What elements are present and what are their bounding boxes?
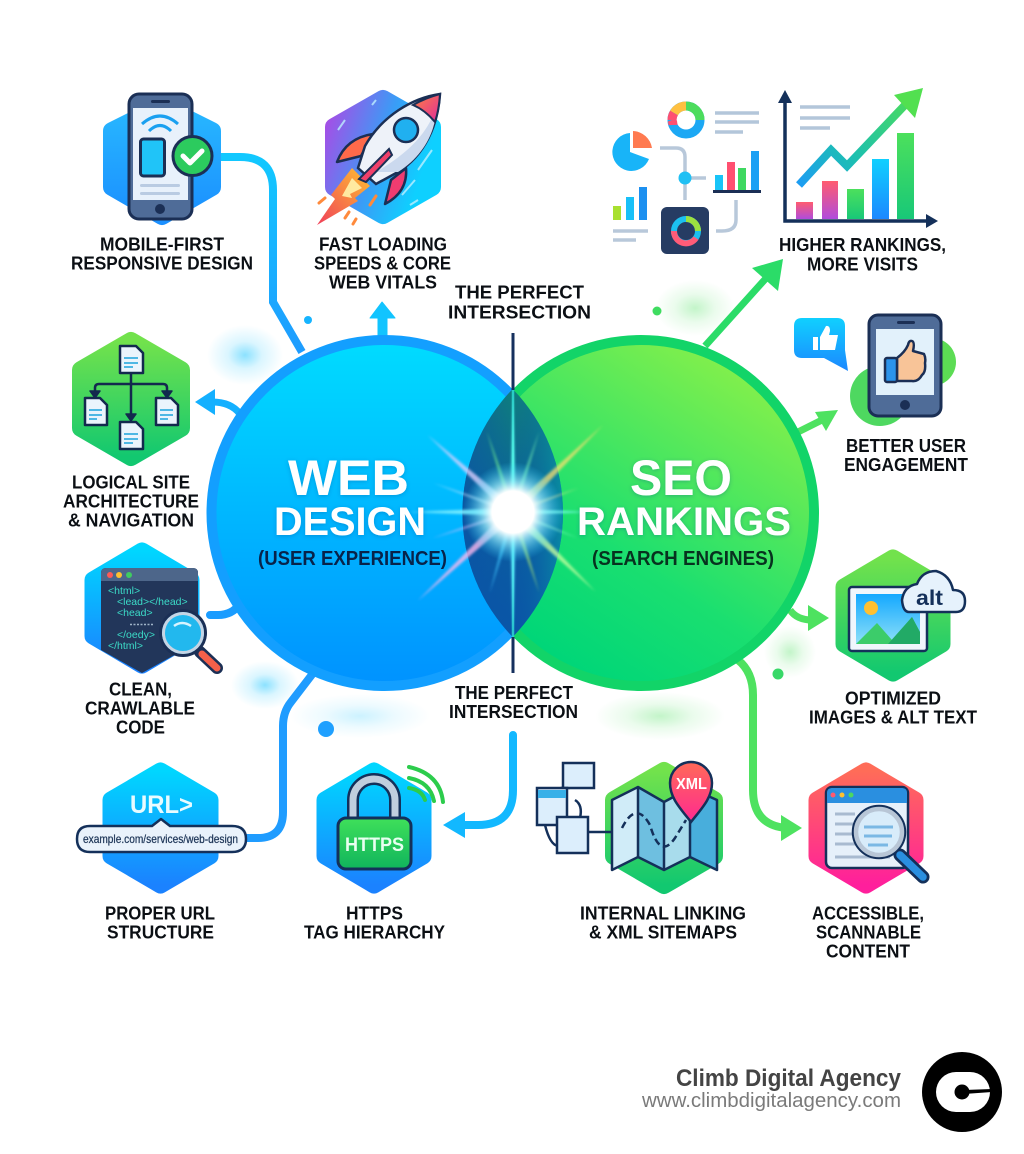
heading: web design: WEB <box>288 450 409 506</box>
icon: clean code: </oedy> <box>117 629 155 641</box>
label: internal linking: INTERNAL LINKING <box>580 904 746 924</box>
decorative glow: bottom blue <box>290 694 430 738</box>
arrow: to site architecture <box>195 389 240 415</box>
dot: blue large <box>318 721 334 737</box>
label: clean code <box>85 680 195 738</box>
label: clean code: CODE <box>116 718 165 738</box>
dot: green right <box>772 668 784 680</box>
label: fast loading: WEB VITALS <box>329 272 437 292</box>
label: site architecture: ARCHITECTURE <box>63 492 199 512</box>
label: https: HTTPS <box>346 904 403 924</box>
label: accessible content: ACCESSIBLE, <box>812 904 924 924</box>
heading: seo rankings: RANKINGS <box>577 500 791 544</box>
label: site architecture <box>63 472 199 530</box>
label: mobile-first: RESPONSIVE DESIGN <box>71 254 253 274</box>
dot: green small <box>652 306 662 316</box>
heading: seo rankings <box>577 450 791 544</box>
label: https <box>304 904 445 942</box>
icon: clean code <box>93 551 217 673</box>
label: the perfect intersection top: INTERSECTION <box>448 302 591 322</box>
icon: optimized images <box>844 558 965 673</box>
decorative glow: left top <box>207 325 283 385</box>
footer: agency name <box>641 1065 902 1112</box>
label: url structure: STRUCTURE <box>107 922 214 942</box>
icon: clean code: <lead></head> <box>117 596 188 608</box>
label: url structure: PROPER URL <box>105 904 215 924</box>
label: optimized images <box>809 688 977 728</box>
intersection lens <box>462 389 563 637</box>
icon: url structure: URL> <box>130 791 193 819</box>
decorative glow: left lower <box>231 661 299 709</box>
label: higher rankings <box>779 235 946 274</box>
subheading: search engines: (SEARCH ENGINES) <box>592 548 774 570</box>
arrow: better engagement <box>798 410 838 432</box>
label: better user engagement: BETTER USER <box>846 436 966 456</box>
decorative glow: right green <box>764 626 816 678</box>
label: clean code: CRAWLABLE <box>85 698 195 718</box>
icon: analytics cluster <box>612 106 761 254</box>
icon: clean code: <head> <box>117 607 153 619</box>
label: https: TAG HIERARCHY <box>304 922 445 942</box>
label: fast loading: FAST LOADING <box>319 234 447 254</box>
label: accessible content: CONTENT <box>826 942 910 962</box>
icon: optimized images: alt <box>916 587 943 610</box>
heading: seo rankings: SEO <box>630 450 732 506</box>
dot: blue small <box>304 316 312 324</box>
arrow: mobile connector <box>218 157 302 352</box>
label: better user engagement <box>844 436 968 475</box>
label: the perfect intersection bottom: THE PERFECT <box>455 683 573 703</box>
footer: agency name: www.climbdigitalagency.com <box>641 1090 901 1112</box>
icon: clean code: </html> <box>108 640 143 652</box>
icon: accessible content <box>817 771 923 885</box>
label: optimized images: IMAGES & ALT TEXT <box>809 708 977 728</box>
label: clean code: CLEAN, <box>109 680 172 700</box>
label: internal linking: & XML SITEMAPS <box>589 922 737 942</box>
arrow: optimized images <box>790 605 829 631</box>
logo <box>922 1052 1002 1132</box>
circle: seo rankings <box>468 340 814 686</box>
decorative glow: top green <box>655 280 735 336</box>
icon: user engagement <box>794 315 956 426</box>
venn diagram <box>212 333 814 686</box>
label: mobile-first: MOBILE-FIRST <box>100 234 224 254</box>
chart: higher rankings bar chart <box>778 88 938 228</box>
label: the perfect intersection top: THE PERFECT <box>455 282 584 302</box>
icon: internal linking and xml map: XML <box>676 776 707 793</box>
icon: rocket <box>317 94 440 225</box>
icon: https lock: HTTPS <box>345 835 404 856</box>
icon: https lock <box>325 767 443 885</box>
icon: site architecture <box>81 341 181 457</box>
label: mobile-first <box>71 234 253 274</box>
label: url structure <box>105 904 215 942</box>
label: the perfect intersection top <box>448 282 591 322</box>
label: internal linking <box>580 904 746 942</box>
trend arrow <box>799 88 923 185</box>
starburst <box>408 394 606 630</box>
divider line <box>512 333 514 673</box>
arrow: URL connector <box>244 672 314 838</box>
arrow: accessible content <box>738 660 802 841</box>
icon: mobile-first phone <box>112 94 212 219</box>
icon: url structure: example.com/services/web-design <box>83 832 238 846</box>
chart bars <box>796 133 914 219</box>
arrow: to HTTPS <box>443 735 513 838</box>
label: fast loading <box>314 234 451 292</box>
subheading: user experience: (USER EXPERIENCE) <box>258 548 447 570</box>
label: better user engagement: ENGAGEMENT <box>844 455 968 475</box>
label: optimized images: OPTIMIZED <box>845 688 941 708</box>
icon: url structure <box>77 771 246 885</box>
label: higher rankings: MORE VISITS <box>807 254 918 274</box>
label: fast loading: SPEEDS & CORE <box>314 254 451 274</box>
heading: web design: DESIGN <box>274 500 426 544</box>
label: accessible content <box>812 904 924 962</box>
decorative glow: bottom green <box>595 692 725 740</box>
label: the perfect intersection bottom: INTERSECTION <box>449 702 578 722</box>
label: the perfect intersection bottom <box>449 683 578 722</box>
arrow: up to fast loading <box>370 302 395 340</box>
icon: internal linking and xml map <box>537 762 717 885</box>
label: accessible content: SCANNABLE <box>816 922 921 942</box>
label: site architecture: LOGICAL SITE <box>72 472 190 492</box>
arrow: higher rankings <box>705 259 783 346</box>
label: site architecture: & NAVIGATION <box>68 510 194 530</box>
footer: agency name: Climb Digital Agency <box>676 1065 902 1092</box>
arrow: from clean code <box>210 604 240 615</box>
circle: web design <box>212 340 558 686</box>
chart axes <box>778 90 938 228</box>
heading: web design <box>274 450 426 544</box>
icon: clean code: <html> <box>108 585 140 597</box>
label: higher rankings: HIGHER RANKINGS, <box>779 235 946 255</box>
